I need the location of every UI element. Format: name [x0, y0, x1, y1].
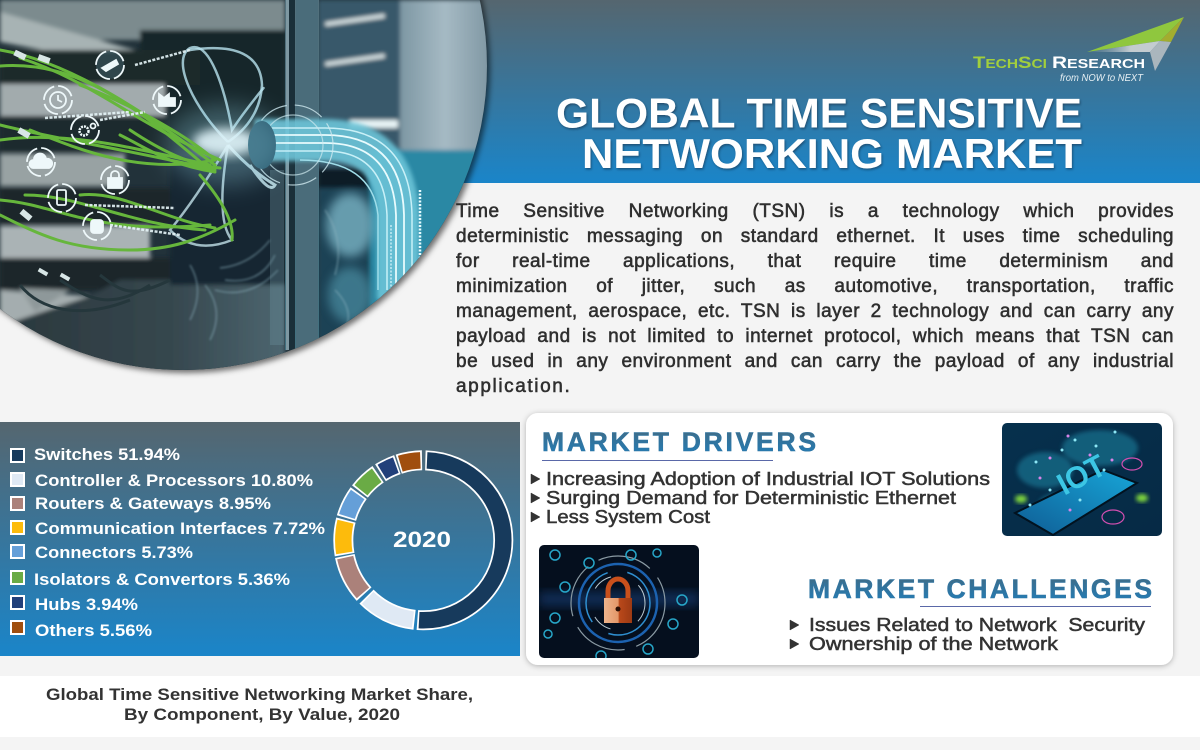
- list: market drivers: Increasing Adoption of Industrial IOT Solutions: [546, 469, 990, 489]
- legend: Controller & Processors 10.80%: [35, 471, 313, 490]
- green network cables: [0, 50, 235, 250]
- list: market drivers: [531, 469, 990, 527]
- legend: Routers & Gateways 8.95%: [35, 494, 271, 513]
- heading: market drivers: MARKET DRIVERS: [542, 427, 816, 457]
- list: market challenges: Issues Related to Network Security: [809, 615, 1145, 635]
- donut centre year: 2020: [393, 527, 451, 552]
- image: IoT smartphone: IOT: [1051, 448, 1112, 502]
- icon: database: [83, 212, 111, 240]
- list: market challenges: Ownership of the Network: [809, 634, 1059, 654]
- body text: TSN description: for real-time applications, that require time determinism and: [456, 251, 1174, 272]
- body text: TSN description: be used in any environment and can carry the payload of any industrial: [456, 351, 1174, 372]
- legend: Hubs 3.94%: [35, 595, 138, 614]
- icon: camera: [96, 51, 124, 79]
- body text: TSN description: [456, 201, 1174, 397]
- panel: market share by component: [0, 422, 520, 656]
- donut chart: [343, 460, 503, 620]
- header band: [0, 0, 1200, 183]
- image: IoT smartphone: [1002, 423, 1162, 536]
- title: [556, 90, 1082, 177]
- title: NETWORKING MARKET: [582, 130, 1082, 177]
- icon: clock: [44, 86, 72, 114]
- legend: Others 5.56%: [35, 621, 152, 640]
- body text: TSN description: application.: [456, 376, 571, 397]
- logo: TechSci Research: RESEARCH: [1052, 53, 1145, 72]
- logo: TechSci Research: TECH SCI: [973, 53, 1047, 72]
- legend: Communication Interfaces 7.72%: [35, 519, 325, 538]
- list: market drivers: Less System Cost: [546, 507, 710, 527]
- legend: Isolators & Convertors 5.36%: [34, 570, 290, 589]
- legend: Connectors 5.73%: [35, 543, 193, 562]
- panel: drivers and challenges card: [526, 413, 1173, 665]
- body text: TSN description: minimization of jitter, such as automotive, transportation, traffic: [456, 276, 1174, 297]
- icon: factory: [153, 86, 181, 114]
- body text: TSN description: Time Sensitive Networking (TSN) is a technology which provides: [456, 201, 1174, 222]
- icon: gears: [71, 116, 99, 144]
- body text: TSN description: management, aerospace, etc. TSN is layer 2 technology and can carry any: [456, 301, 1174, 322]
- caption band: Global Time Sensitive Networking Market Share,: [46, 686, 473, 704]
- list: market drivers: Surging Demand for Deterministic Ethernet: [546, 488, 956, 508]
- logo: TechSci Research: from NOW to NEXT: [1060, 72, 1144, 84]
- legend: Switches 51.94%: [34, 445, 180, 464]
- connector light lines: [45, 50, 190, 235]
- caption band: By Component, By Value, 2020: [124, 706, 400, 724]
- icon: smartphone: [48, 184, 76, 212]
- vertical pillar: [270, 0, 319, 350]
- glowing fibre bundle: [170, 47, 420, 330]
- caption band: [0, 676, 1200, 737]
- legend: [11, 445, 325, 640]
- icons on network nodes: [27, 51, 181, 240]
- body text: TSN description: payload and is not limited to internet protocol, which means that TSN can: [456, 326, 1174, 347]
- logo: TechSci Research: [973, 17, 1184, 84]
- title: GLOBAL TIME SENSITIVE: [556, 90, 1082, 136]
- body text: TSN description: deterministic messaging on standard ethernet. It uses time scheduling: [456, 226, 1174, 247]
- icon: padlock: [101, 166, 129, 194]
- image: digital padlock: [539, 545, 699, 661]
- hero image: networking cables in a circle: [0, 0, 500, 380]
- pale background wires: [190, 210, 348, 340]
- list: market challenges: [790, 615, 1145, 654]
- heading: market challenges: MARKET CHALLENGES: [808, 574, 1152, 604]
- icon: cloud: [27, 148, 55, 176]
